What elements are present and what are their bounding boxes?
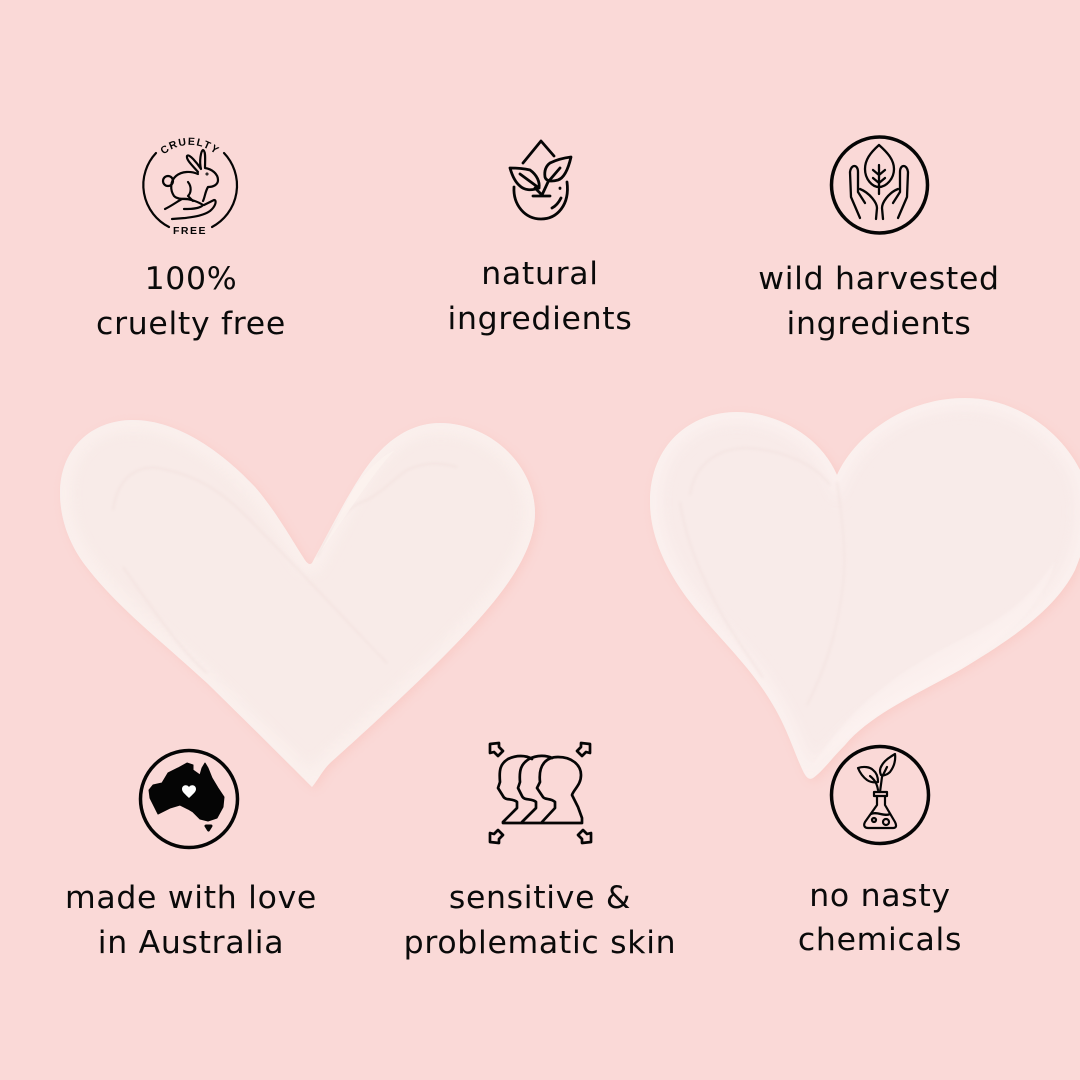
icon: australia map badge	[140, 750, 238, 848]
text: natural ingredients: ingredients	[448, 301, 632, 337]
icon: no nasty chemicals flask	[832, 746, 928, 844]
text: wild harvested ingredients	[758, 261, 1000, 342]
text: made with love in Australia: in Australia	[98, 925, 284, 961]
text: natural ingredients: natural	[481, 256, 599, 292]
text: sensitive and problematic skin	[404, 880, 676, 961]
text: no nasty chemicals: no nasty	[809, 878, 951, 914]
text: made with love in Australia	[65, 880, 317, 961]
text: 100% cruelty free: 100%	[145, 261, 237, 297]
text: 100% cruelty free	[96, 261, 286, 342]
text: wild harvested ingredients: wild harvested	[758, 261, 1000, 297]
text: made with love in Australia: made with love	[65, 880, 317, 916]
icon: cruelty free rabbit	[142, 138, 238, 237]
icon: natural ingredients drop	[510, 141, 571, 219]
text: natural ingredients	[448, 256, 632, 337]
icon: sensitive and problematic skin faces	[490, 743, 591, 843]
text: 100% cruelty free: cruelty free	[96, 306, 286, 342]
left cream heart	[60, 420, 538, 790]
text: sensitive and problematic skin: sensitive &	[449, 880, 631, 916]
text: wild harvested ingredients: ingredients	[787, 306, 971, 342]
right cream heart	[650, 398, 1080, 782]
icon: wild harvested hands and leaf	[832, 137, 928, 233]
text: no nasty chemicals: chemicals	[798, 922, 962, 958]
text: no nasty chemicals	[798, 878, 962, 958]
text: sensitive and problematic skin: problematic skin	[404, 925, 676, 961]
icon: cruelty free rabbit: FREE	[173, 225, 207, 237]
icon: cruelty free rabbit: CRUELTY	[160, 138, 220, 154]
